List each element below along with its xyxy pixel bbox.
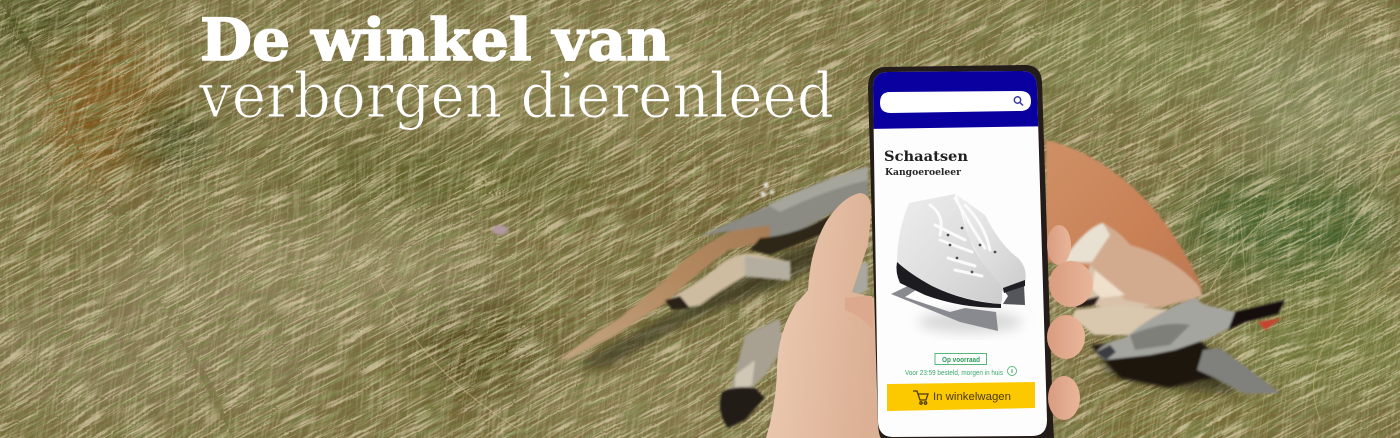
phone: product subtitle: Kangoeroeleer	[885, 167, 962, 178]
hand: palm and thumb	[766, 193, 882, 438]
skates: front blade	[891, 284, 998, 331]
phone: screen	[873, 71, 1047, 437]
icon: cart	[913, 391, 928, 404]
kangaroo: lower ear	[1197, 348, 1280, 394]
phone: body	[868, 65, 1054, 438]
stock badge: Op voorraad	[942, 355, 980, 364]
kangaroo: dark shadow under head	[1090, 335, 1235, 388]
kangaroo: tail	[558, 166, 868, 361]
icon: search magnifier	[1014, 97, 1023, 106]
kangaroo: ground shadow	[570, 225, 1240, 395]
smartphone	[865, 65, 1060, 438]
small white flowers	[760, 182, 774, 196]
skates: front sole and heel	[896, 262, 1001, 308]
title: bold line: De winkel van	[200, 6, 670, 74]
hand: fingers on phone edge	[1047, 225, 1093, 420]
phone: search bar	[880, 91, 1031, 113]
skates: front boot	[897, 194, 1002, 304]
kangaroo: pale forelimb and chest	[1062, 223, 1203, 335]
add to cart button: In winkelwagen	[933, 391, 1011, 403]
skates: soft shadow	[918, 311, 1022, 333]
icon: info	[1008, 366, 1016, 376]
kangaroo: front leg and paw	[720, 318, 782, 428]
title	[198, 6, 834, 132]
title: light line: verborgen dierenleed	[198, 59, 834, 132]
kangaroo: hind leg	[665, 254, 868, 310]
add to cart button	[887, 382, 1035, 411]
skates: laces	[930, 198, 990, 276]
product image: ice skates	[891, 194, 1026, 333]
flower speck	[492, 225, 508, 235]
phone: product title: Schaatsen	[884, 149, 968, 165]
kangaroo carcass	[558, 140, 1285, 428]
delivery note: Voor 23:59 besteld, morgen in huis	[905, 370, 1003, 377]
kangaroo: orange body	[1046, 140, 1203, 305]
skates: rear skate	[957, 195, 1026, 305]
phone: blue header	[873, 71, 1038, 129]
kangaroo: head and ear	[1096, 298, 1285, 360]
